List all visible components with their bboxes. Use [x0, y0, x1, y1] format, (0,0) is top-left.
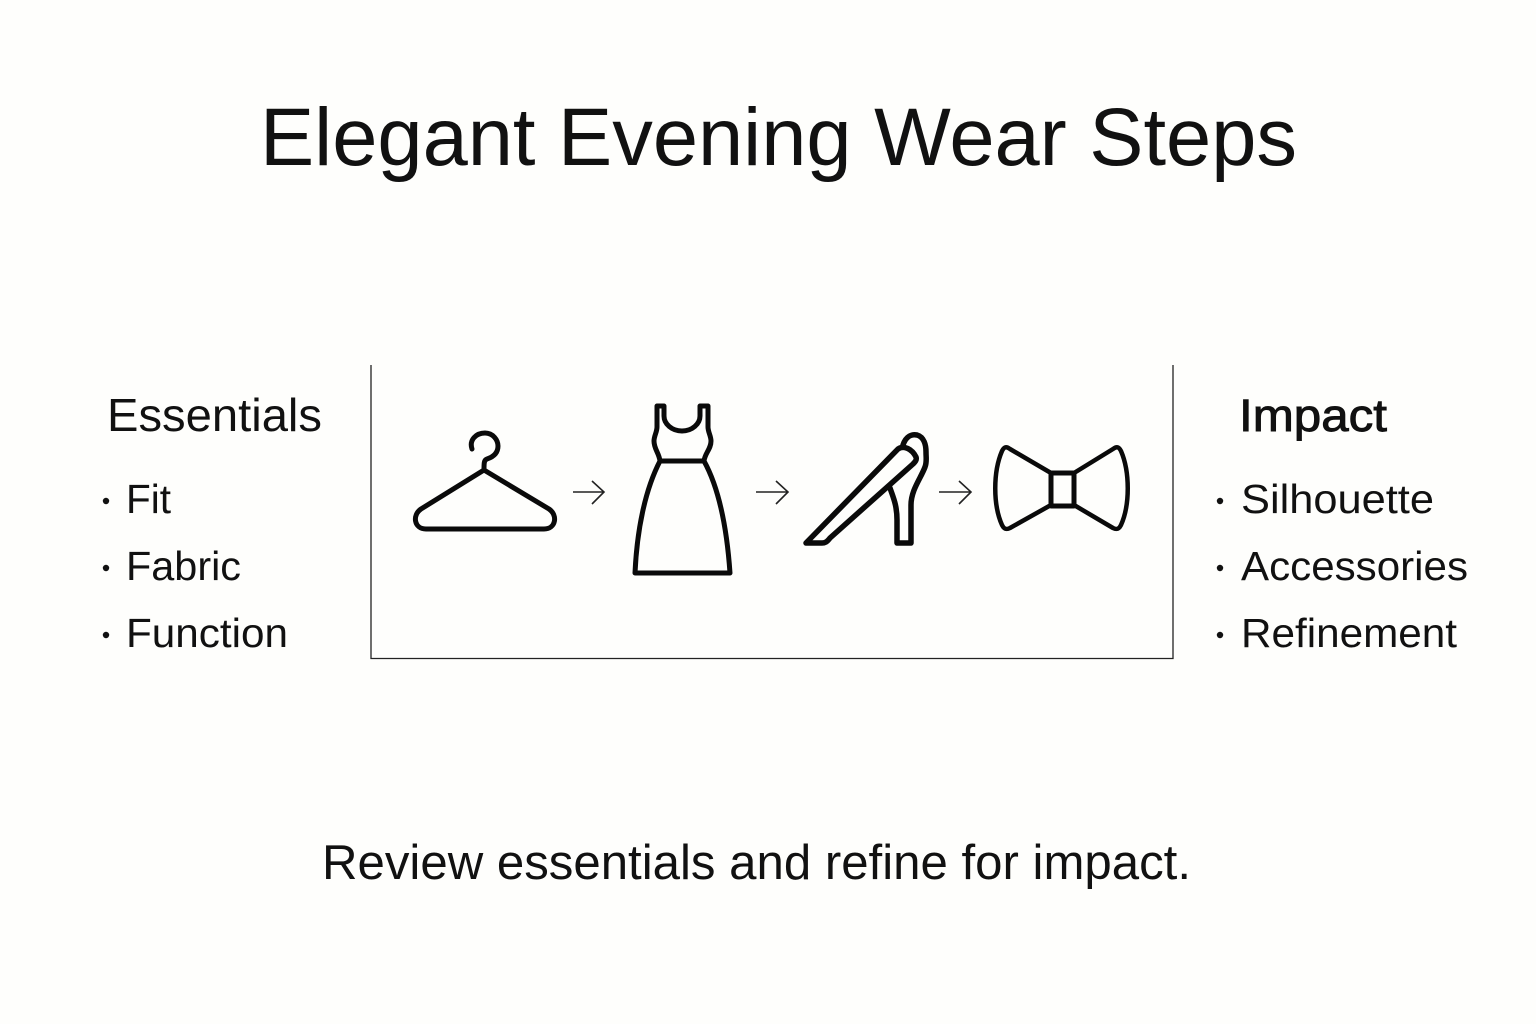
list item: silhouette: Silhouette: [1241, 476, 1434, 522]
arrow: shoe to bow tie: [939, 481, 971, 504]
panel: steps frame: [371, 365, 1173, 658]
list item: accessories: Accessories: [1241, 543, 1468, 589]
arrow: hanger to dress: [573, 481, 604, 504]
footer caption: Review essentials and refine for impact.: [322, 836, 1191, 890]
list item: function: Function: [126, 610, 288, 656]
panel: impact: [1217, 390, 1468, 656]
icon: hanger: [415, 433, 555, 529]
list item: fit: Fit: [126, 476, 172, 522]
list item: refinement: Refinement: [1241, 610, 1458, 656]
title: Elegant Evening Wear Steps: [260, 92, 1297, 183]
panel: essentials: [103, 389, 322, 656]
icon: dress: [635, 406, 730, 573]
icon: bow tie: [995, 447, 1128, 529]
icon: high heel shoe: [806, 435, 926, 543]
heading: impact: Impact: [1239, 390, 1388, 441]
list item: fabric: Fabric: [126, 543, 241, 589]
heading: essentials: Essentials: [107, 389, 322, 441]
arrow: dress to shoe: [756, 481, 788, 504]
list item: fit: [103, 476, 172, 522]
